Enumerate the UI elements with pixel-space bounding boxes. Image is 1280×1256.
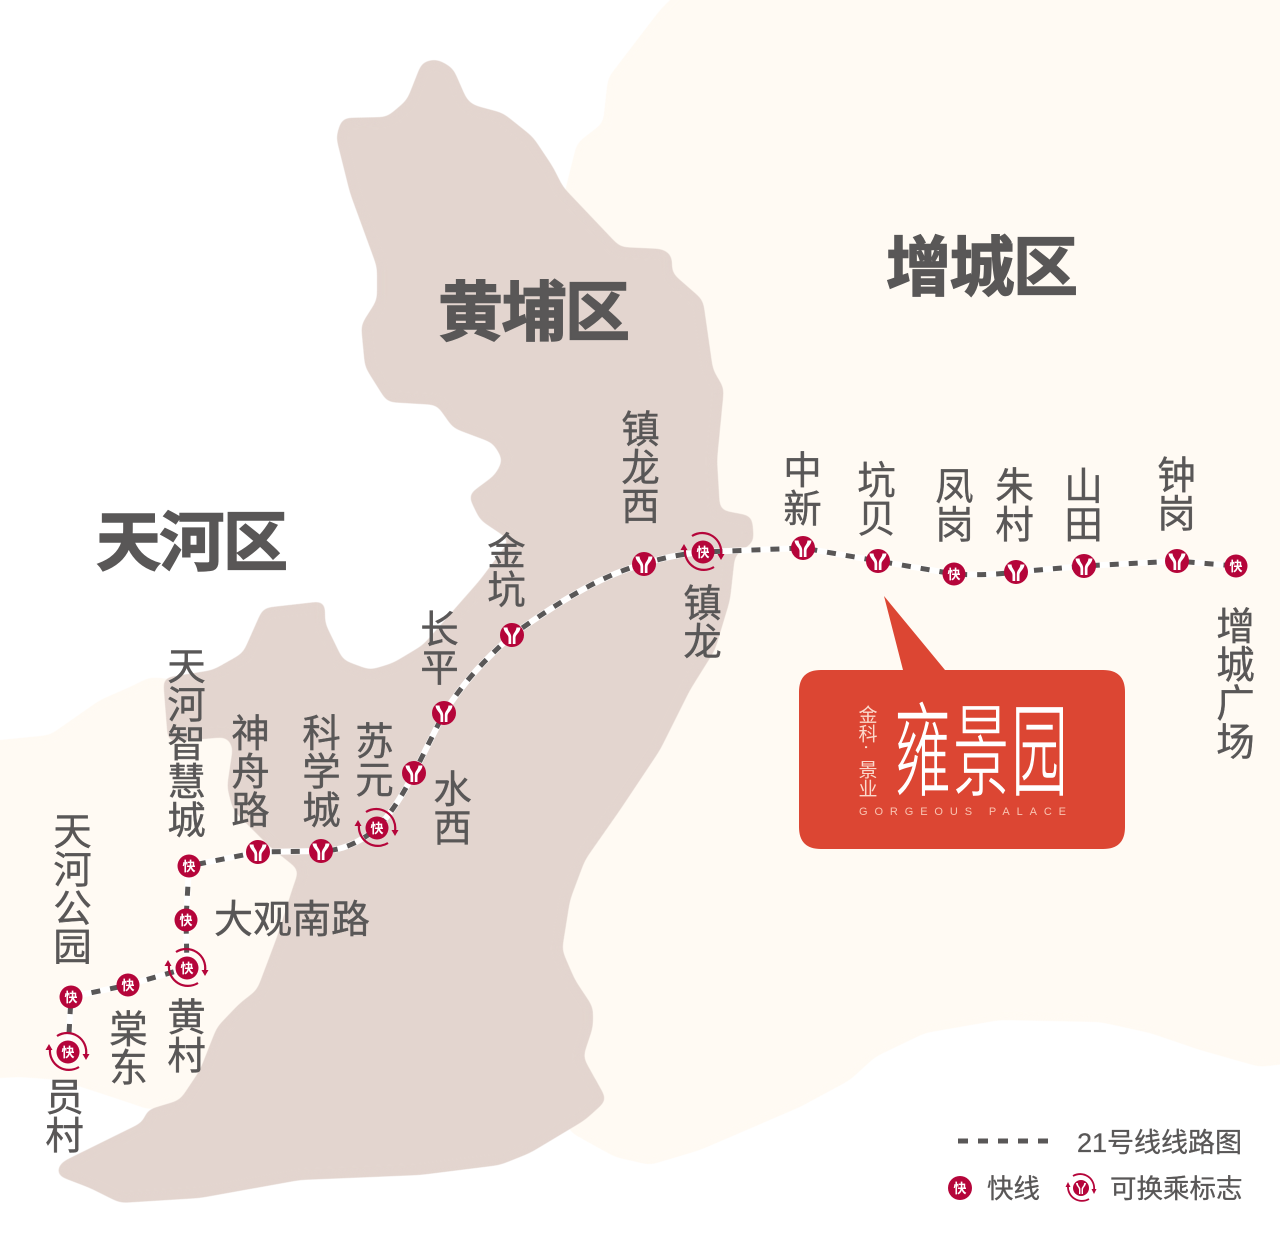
station: Yuancun transfer: 快 [61, 1045, 75, 1060]
station: Huangcun transfer: 快 [180, 961, 194, 976]
station: Suyuan transfer [354, 809, 398, 846]
station: Zhenlong transfer [680, 533, 724, 570]
label: Kengbei: 坑贝 [852, 460, 895, 537]
callout: Gorgeous Palace logo: 景业 [856, 760, 877, 798]
label: Changping: 长平 [414, 609, 458, 686]
label: Zhonggang: 钟岗 [1152, 455, 1195, 532]
callout: Gorgeous Palace logo: GORGEOUS PALACE [859, 806, 1066, 818]
label: Zhucun: 朱村 [990, 466, 1033, 543]
station: Huangcun transfer [164, 949, 208, 986]
station: Zengcheng Square [1224, 554, 1248, 578]
callout: Gorgeous Palace logo: 雍景园 [894, 695, 1068, 810]
station: Zhenlong transfer: 快 [696, 545, 710, 560]
station: Tianhe Smart City: 快 [182, 859, 196, 874]
legend: express station [948, 1174, 1040, 1204]
station: Fenggang: 快 [947, 567, 961, 582]
station: Tianhe Smart City [178, 854, 200, 878]
station: Zhongxin [791, 536, 815, 560]
label: Science City: 科学城 [296, 713, 340, 829]
route line 21 [68, 548, 1236, 1052]
label: Yuancun: 员村 [40, 1077, 83, 1154]
heading: Tianhe: 天河区 [96, 506, 288, 579]
label: Shenzhou Road: 神舟路 [226, 713, 269, 828]
legend: express station: 快线 [987, 1174, 1040, 1204]
label: Zhenlong: 镇龙 [678, 583, 721, 660]
legend: transfer station: 可换乘标志 [1110, 1174, 1242, 1204]
heading: Huangpu: 黄埔区 [438, 276, 630, 349]
station: Zengcheng Square: 快 [1229, 559, 1243, 574]
label: Zhenlong West: 镇龙西 [616, 409, 659, 524]
station: Suyuan transfer: 快 [370, 821, 384, 836]
legend: route line: 21号线线路图 [1077, 1128, 1242, 1158]
label: Shantian: 山田 [1058, 466, 1102, 543]
station: Changping [432, 701, 456, 725]
station: Shenzhou Road [246, 840, 270, 864]
region: Tianhe district [0, 677, 320, 1110]
station: Tangdong: 快 [121, 978, 135, 993]
label: Daguan South Road: 大观南路 [214, 899, 370, 942]
station: Shuixi [402, 761, 426, 785]
heading: Zengcheng: 增城区 [886, 231, 1078, 304]
label: Huangcun: 黄村 [162, 997, 205, 1074]
callout: Gorgeous Palace logo [799, 596, 1125, 849]
station: Science City [309, 839, 333, 863]
station: Kengbei [866, 549, 890, 573]
station: Shantian [1072, 554, 1096, 578]
station: Tianhe Park: 快 [64, 990, 78, 1005]
label: Shuixi: 水西 [428, 769, 471, 846]
station: Zhonggang [1165, 549, 1189, 573]
station: Zhucun [1004, 560, 1028, 584]
station: Tianhe Park [60, 986, 82, 1008]
region: Huangpu district [56, 59, 754, 1203]
label: Tianhe Smart City: 天河智慧城 [162, 646, 205, 839]
callout: Gorgeous Palace logo: · [856, 744, 876, 750]
legend: express station: 快 [953, 1181, 967, 1196]
label: Fenggang: 凤岗 [930, 466, 973, 543]
label: Zengcheng Square: 增城广场 [1210, 606, 1254, 760]
label: Tianhe Park: 天河公园 [48, 811, 91, 965]
station: Daguan South Road: 快 [179, 913, 193, 928]
region: Zengcheng district [480, 0, 1280, 1165]
label: Zhongxin: 中新 [778, 450, 821, 527]
station: Tangdong [116, 974, 140, 996]
station: Zhenlong West [632, 552, 656, 576]
station: Yuancun transfer [46, 1033, 90, 1070]
station: Daguan South Road [174, 908, 198, 932]
callout: Gorgeous Palace logo: 金科 [856, 705, 877, 743]
label: Suyuan: 苏元 [350, 721, 393, 798]
station: Jinkeng [500, 623, 524, 647]
label: Jinkeng: 金坑 [482, 531, 525, 608]
station: Fenggang [942, 562, 966, 586]
label: Tangdong: 棠东 [104, 1009, 147, 1086]
